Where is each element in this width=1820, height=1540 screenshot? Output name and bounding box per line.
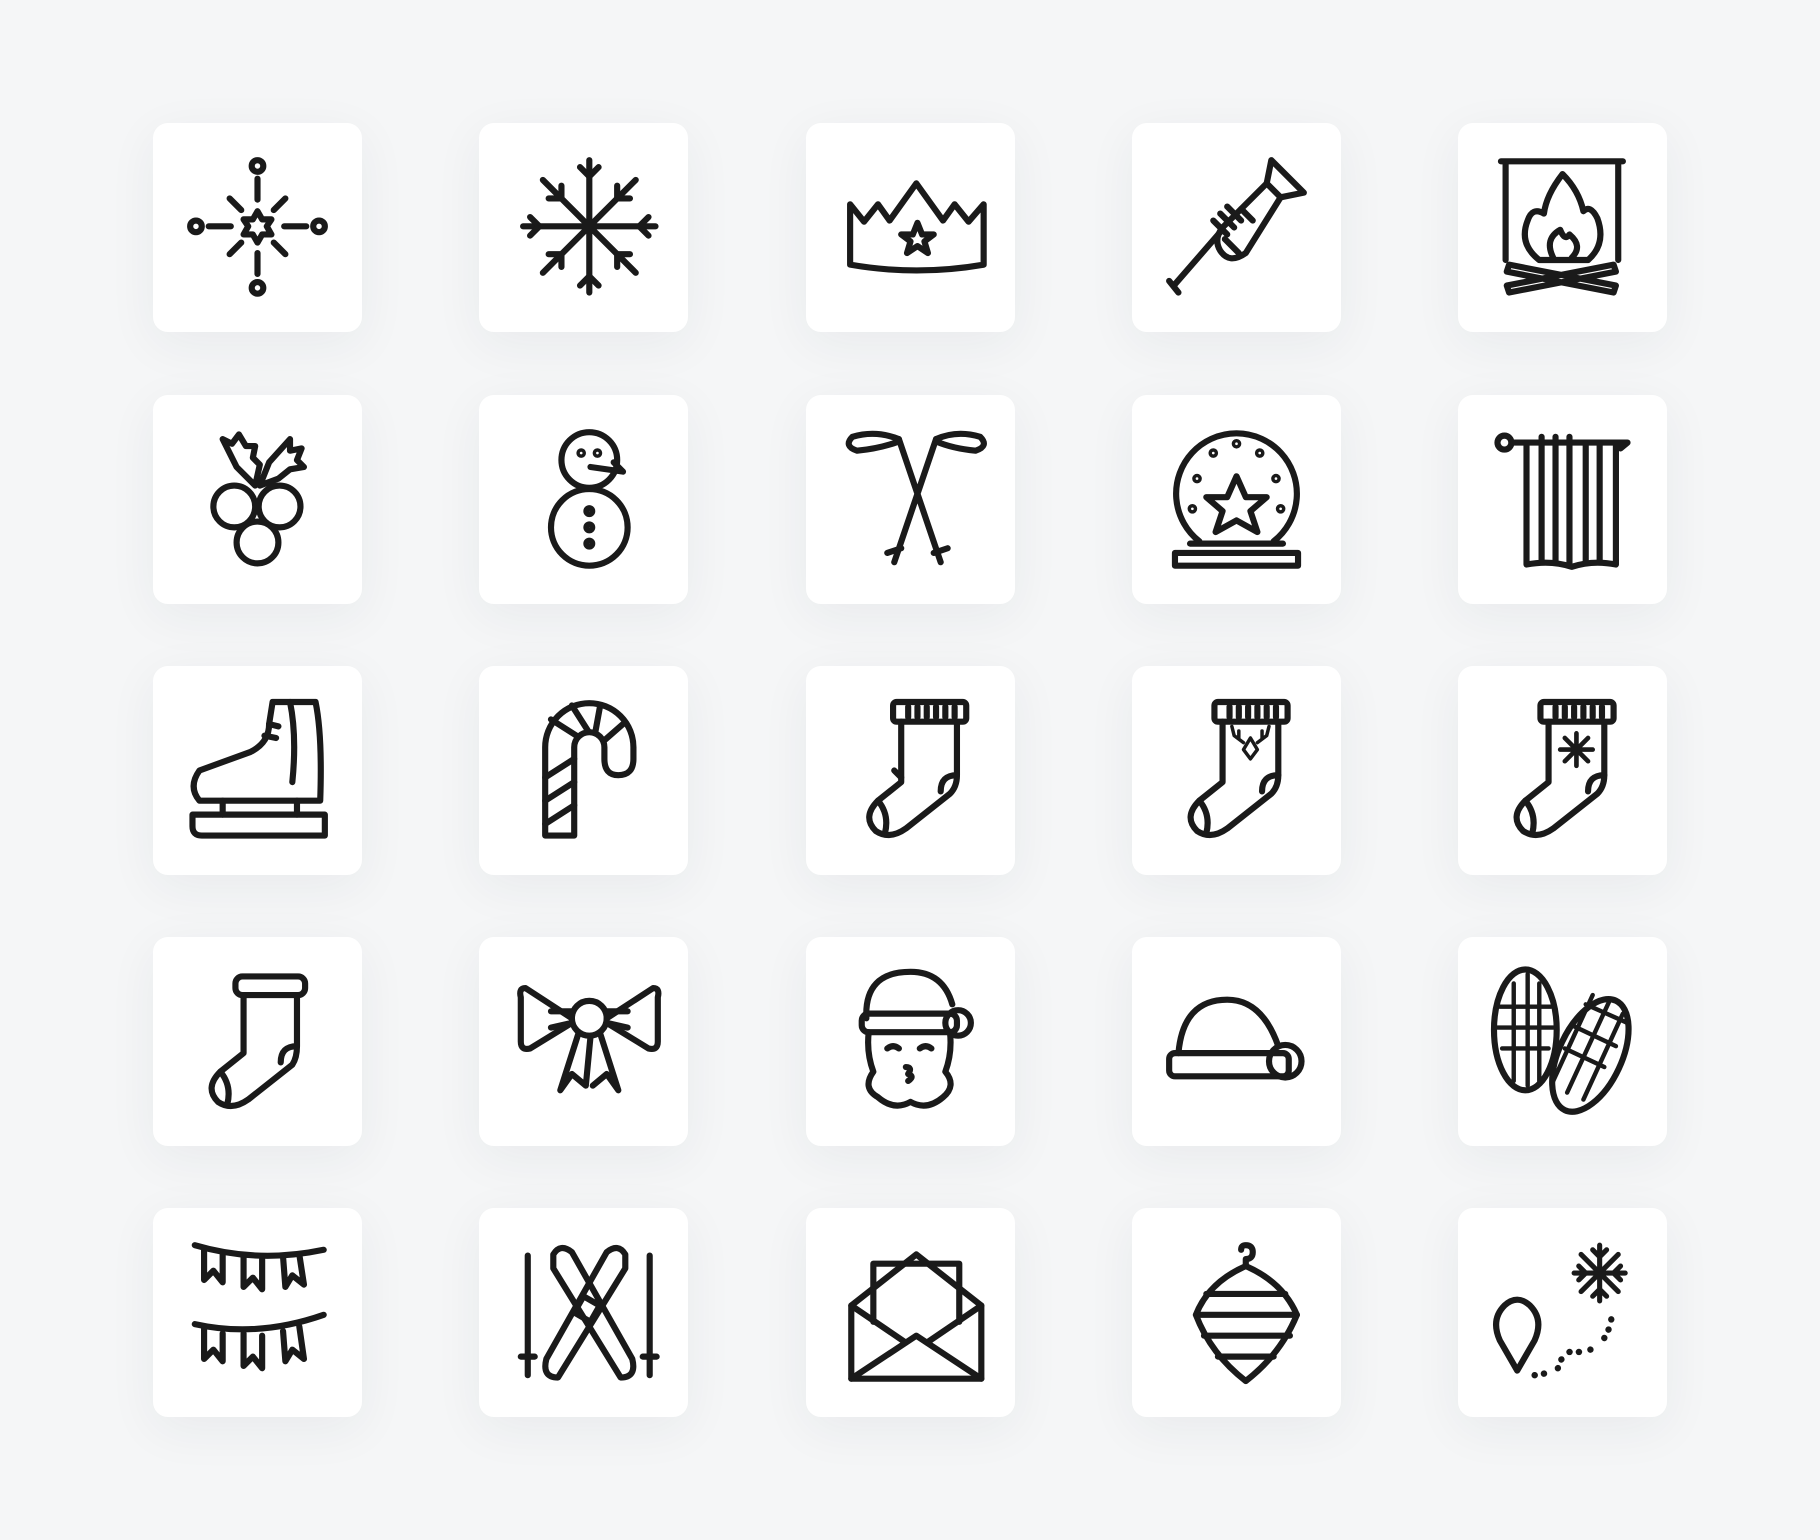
icon: ski poles xyxy=(806,395,1015,604)
icon: bunting garlands xyxy=(153,1208,362,1417)
icon: ice skate xyxy=(153,666,362,875)
icon: fireplace xyxy=(1458,123,1667,332)
icon: candy cane xyxy=(479,666,688,875)
icon: sparkle star xyxy=(153,123,362,332)
icon: stocking with snowflake xyxy=(1458,666,1667,875)
icon: trumpet xyxy=(1132,123,1341,332)
icon: plain stocking xyxy=(153,937,362,1146)
icon: holly berries xyxy=(153,395,362,604)
icon: stocking with reindeer xyxy=(1132,666,1341,875)
icon: santa hat xyxy=(1132,937,1341,1146)
icon: snowman xyxy=(479,395,688,604)
icon: bow xyxy=(479,937,688,1146)
icon: envelope xyxy=(806,1208,1015,1417)
icon: snowflake xyxy=(479,123,688,332)
icon: crown xyxy=(806,123,1015,332)
icon: stocking xyxy=(806,666,1015,875)
icon: banner curtain xyxy=(1458,395,1667,604)
icon: snowshoes xyxy=(1458,937,1667,1146)
icon: skis xyxy=(479,1208,688,1417)
icon: map pin route xyxy=(1458,1208,1667,1417)
icon: ornament xyxy=(1132,1208,1341,1417)
icon: snow globe xyxy=(1132,395,1341,604)
icon: santa xyxy=(806,937,1015,1146)
